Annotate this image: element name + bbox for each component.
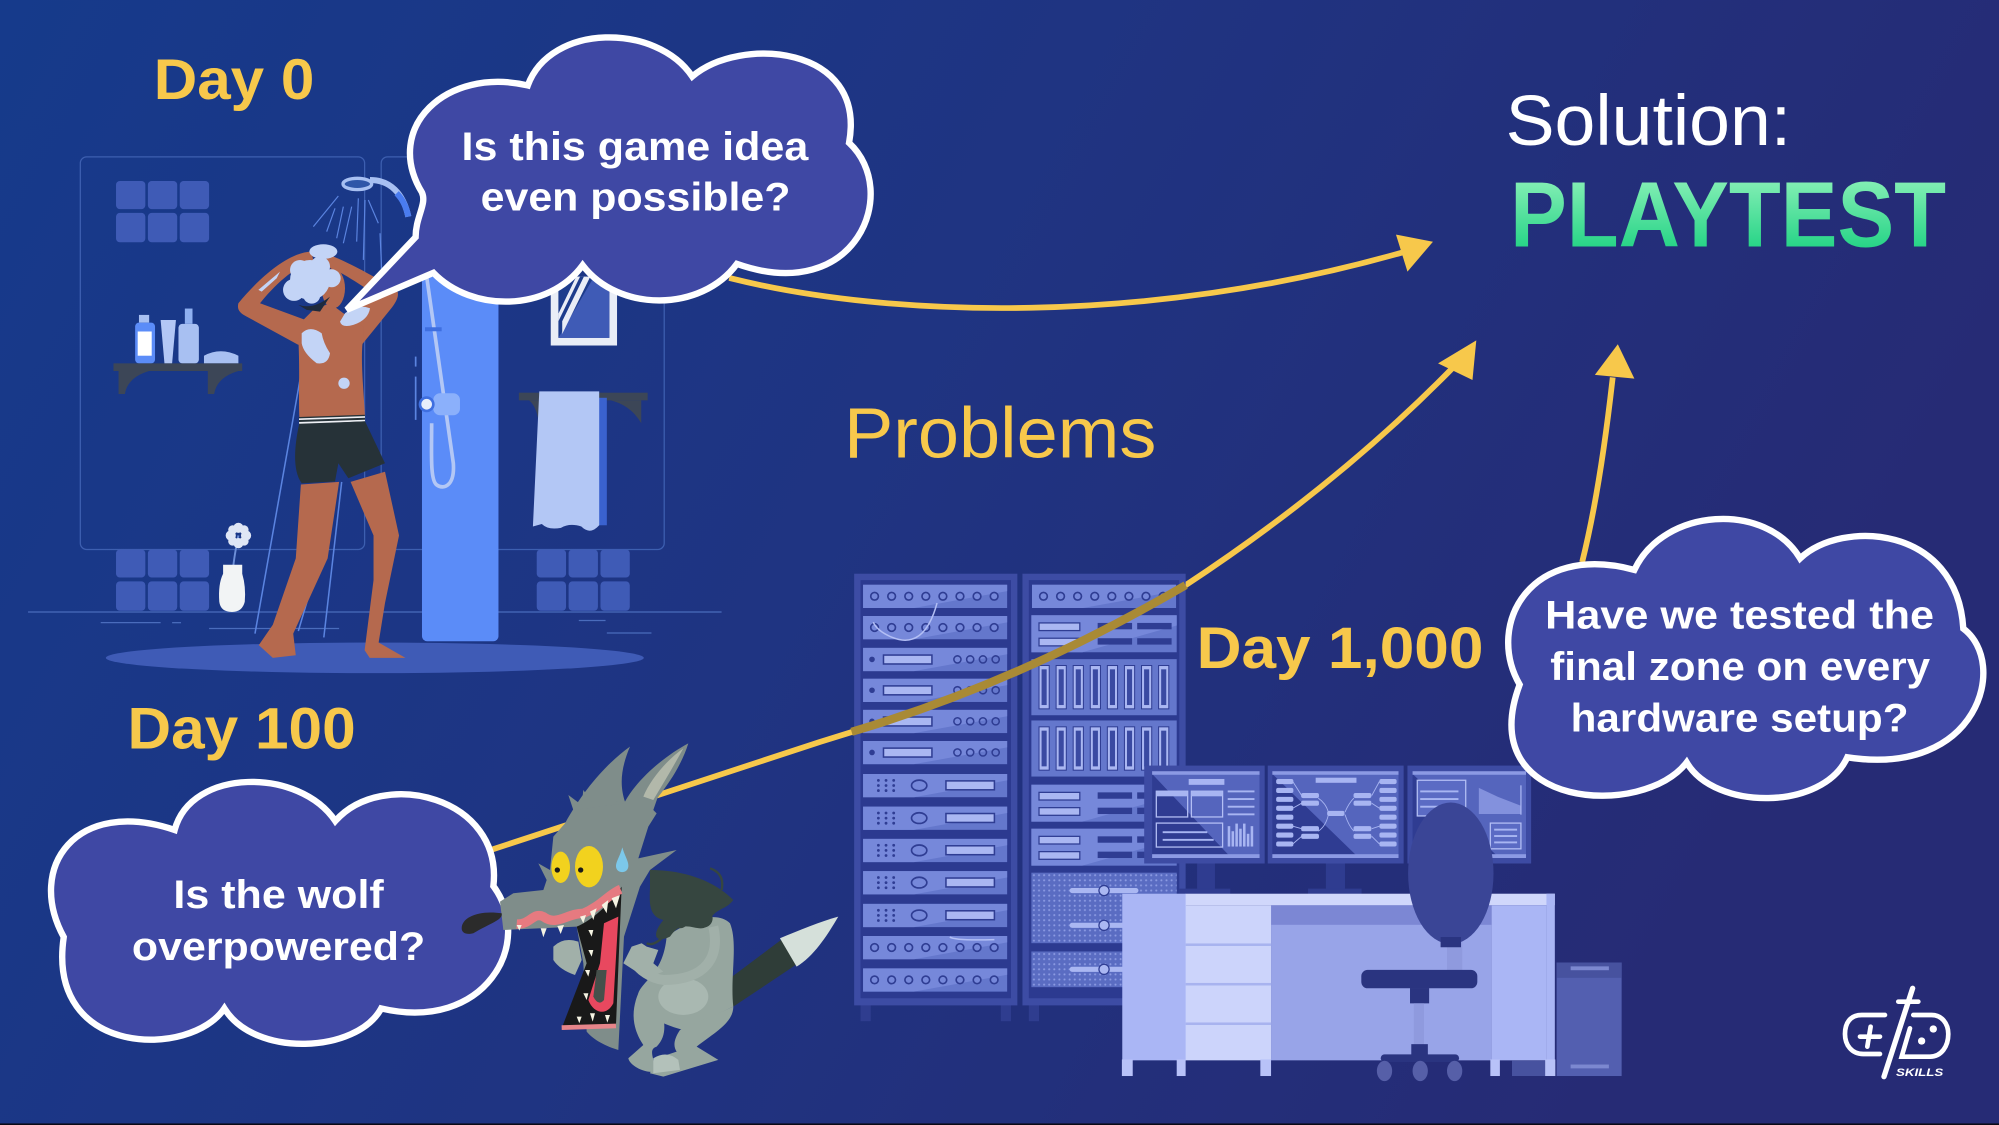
- nose: [462, 912, 502, 934]
- monitor 3: [1407, 766, 1531, 863]
- illustration: panicked wolf: [462, 743, 838, 1077]
- tail: [723, 938, 798, 1007]
- shelf with bottles: [113, 309, 242, 394]
- office chair: [1361, 803, 1494, 1081]
- arrow: from cloud 1 to playtest: [729, 235, 1433, 308]
- bubble text: [1545, 593, 1934, 741]
- mirror: [551, 277, 617, 346]
- speech bubble: day 0: [347, 37, 871, 310]
- speech bubble: day 100: [51, 782, 508, 1044]
- hands: [553, 940, 680, 1073]
- floor ellipse: [106, 643, 644, 673]
- monitor stands: [1179, 863, 1362, 895]
- arrow shaded through racks: [852, 585, 1186, 732]
- shower head: [343, 178, 408, 217]
- wall tiles: [116, 181, 630, 611]
- heading: day 0: Day 0: [154, 48, 314, 112]
- rack 1: [854, 574, 1017, 1021]
- monitor 2: [1268, 766, 1404, 863]
- heading: day 100: Day 100: [127, 696, 356, 761]
- bubble text: final zone on every: [1550, 645, 1930, 689]
- floor lines: [28, 612, 722, 633]
- rack 2: [1022, 574, 1186, 1021]
- ears and head: [500, 743, 688, 1050]
- water drops: [313, 196, 382, 270]
- teeth: [517, 895, 620, 1023]
- mane: [647, 868, 733, 944]
- pc tower: [1557, 963, 1622, 1076]
- logo: gd skills: [1845, 988, 1948, 1079]
- bubble text: Is this game idea: [462, 125, 809, 169]
- wall panels: [80, 157, 664, 549]
- bubble text: Have we tested the: [1545, 593, 1934, 637]
- foam: [258, 244, 370, 389]
- illustration: desk with monitors and chair: [1122, 766, 1622, 1081]
- shower column: [422, 277, 498, 641]
- bubble text: overpowered?: [132, 925, 425, 969]
- heading: day 1,000: Day 1,000: [1197, 616, 1483, 681]
- sweat drop: [616, 847, 628, 872]
- person: [238, 178, 408, 658]
- illustration: bathroom scene with showering person: [28, 157, 722, 673]
- shorts: [295, 421, 385, 483]
- monitor 1: [1144, 766, 1265, 863]
- desk: [1122, 894, 1555, 1076]
- heading: solution: Solution:: [1506, 81, 1791, 161]
- bubble text: [462, 125, 809, 219]
- speech bubble: day 1000: [1508, 519, 1983, 798]
- illustration: server racks: [852, 574, 1186, 1021]
- heading: problems: Problems: [844, 394, 1156, 474]
- water streams: [255, 375, 342, 637]
- towel rail with towel: [519, 391, 648, 531]
- bubble text: hardware setup?: [1571, 697, 1908, 741]
- bubble text: even possible?: [481, 175, 790, 219]
- bubble text: [132, 873, 425, 969]
- waistband: [299, 415, 365, 425]
- eyes: [551, 846, 603, 887]
- arrow: from wolf cloud to playtest: [490, 340, 1476, 850]
- mouth: [562, 887, 622, 1028]
- vase with flower: [219, 523, 251, 612]
- shower hose and controls: [416, 277, 460, 487]
- heading: playtest: PLAYTEST: [1510, 163, 1946, 267]
- body and legs: [628, 917, 734, 1077]
- bubble text: Is the wolf: [173, 873, 385, 917]
- logo: gd skills: SKILLS: [1896, 1067, 1944, 1079]
- arrow: from cloud 3 to playtest: [1582, 344, 1634, 562]
